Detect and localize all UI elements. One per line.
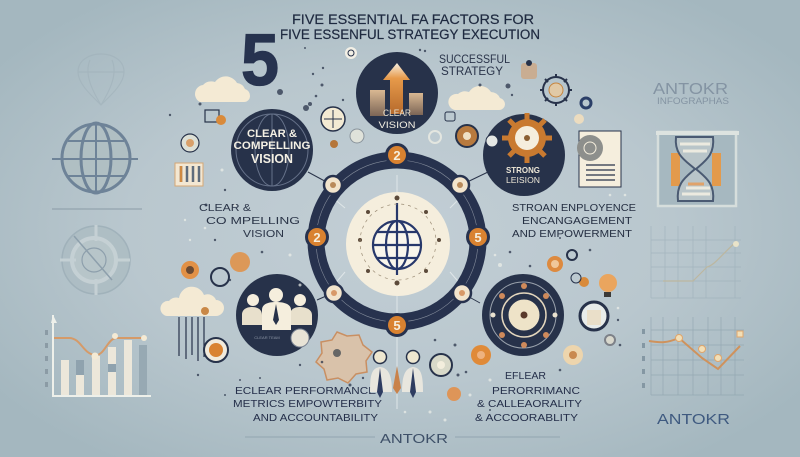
text block: performance metrics: AND ACCOUNTABILITY (253, 412, 378, 424)
brand top right: ANTOKR (653, 81, 728, 98)
centre disc with globe (346, 192, 450, 296)
brand top right: INFOGRAPHAS (657, 96, 729, 106)
title: FIVE ESSENFUL STRATEGY EXECUTION (280, 27, 540, 42)
left globe icon (52, 123, 142, 209)
text block: collaboration accountability: EFLEAR (505, 370, 546, 382)
left globe icon faint balloon (78, 54, 124, 105)
ring node top 2: 2 (393, 148, 401, 163)
panel: team circle: CLEAR TEAM (254, 335, 280, 340)
text block: performance metrics: ECLEAR PERFORMANCE (235, 385, 376, 397)
icon: three people (242, 288, 312, 330)
scattered light dots (184, 168, 626, 422)
footer brand: ANTOKR (380, 432, 448, 446)
ring node bottom 5 (385, 313, 409, 337)
icon: small badges centre (321, 47, 478, 148)
ring node left 2: 2 (313, 230, 321, 245)
panel: clear and compelling vision circle: VISION (251, 151, 293, 166)
title: FIVE ESSENTIAL FA FACTORS FOR (292, 12, 534, 27)
ring node left 2 (305, 225, 329, 249)
icon: gear (502, 113, 552, 163)
big number 5: 5 (241, 20, 279, 101)
brand top right (653, 81, 729, 106)
decorative clouds (195, 76, 505, 110)
ring small nodes (324, 176, 471, 302)
text block: collaboration accountability: & ACCOORABLITY (475, 412, 578, 424)
panel: target compass circle (482, 274, 564, 356)
ring node right 5 (466, 225, 490, 249)
panel: clear and compelling vision circle: CLEAR & (247, 128, 297, 140)
panel: team circle (236, 274, 318, 356)
left bar chart (45, 315, 151, 396)
panel: strong leadership circle (483, 113, 565, 196)
text block: performance metrics (233, 385, 382, 424)
panel: clear and compelling vision circle: COMPELLING (234, 140, 310, 152)
panel: strong leadership circle: LEISION (506, 176, 540, 185)
subtitle: successful strategy (439, 54, 511, 78)
ring node bottom 5: 5 (393, 318, 401, 333)
text block: clear and compelling vision: CLEAR & (199, 202, 251, 214)
central ring (305, 143, 490, 337)
icon: cloud with rain (160, 287, 224, 361)
subtitle: successful strategy: STRATEGY (441, 66, 503, 78)
text block: clear and compelling vision: CO MPELLING (206, 215, 300, 227)
panel: top circle clear vision: VISION (378, 120, 416, 130)
text block: employee engagement: ENCANGAGEMENT (522, 215, 633, 227)
text block: employee engagement (512, 202, 636, 240)
text block: clear and compelling vision: VISION (243, 228, 284, 240)
ring node top 2 (385, 143, 409, 167)
left target icon (60, 225, 130, 295)
text block: collaboration accountability: PERORRIMANC (492, 385, 580, 397)
title (280, 12, 540, 42)
icon: two business people (370, 350, 423, 398)
connector lines (308, 172, 488, 409)
panel: strong leadership circle: STRONG (506, 165, 540, 175)
panel: clear and compelling vision circle (231, 109, 313, 191)
text block: employee engagement: STROAN ENPLOYENCE (512, 202, 636, 214)
text block: collaboration accountability: & CALLEAORALITY (477, 398, 582, 410)
panel: top circle clear vision (356, 52, 438, 134)
line grid chart upper right (651, 226, 741, 298)
text block: employee engagement: AND EMPOWERMENT (512, 228, 633, 240)
text block: collaboration accountability (475, 370, 582, 424)
scattered dots (169, 47, 621, 411)
brand bottom right: ANTOKR (657, 411, 730, 428)
hourglass icon (656, 131, 739, 206)
icon: small badges right (486, 60, 591, 147)
ring node right 5: 5 (474, 230, 482, 245)
icon: document right (577, 131, 621, 187)
icon: small badges left (175, 110, 250, 286)
text block: clear and compelling vision (199, 202, 300, 240)
icon: orange ring lower left (204, 338, 228, 362)
subtitle: successful strategy: SUCCESSFUL (439, 54, 511, 66)
panel: top circle clear vision: CLEAR (383, 108, 411, 118)
icon: small badges lower right (430, 250, 617, 401)
icon: rising arrow (370, 63, 423, 116)
text block: performance metrics: METRICS EMPOWTERBITY (233, 398, 382, 410)
icon: faceted badge (316, 332, 372, 383)
line chart lower right (642, 317, 744, 395)
